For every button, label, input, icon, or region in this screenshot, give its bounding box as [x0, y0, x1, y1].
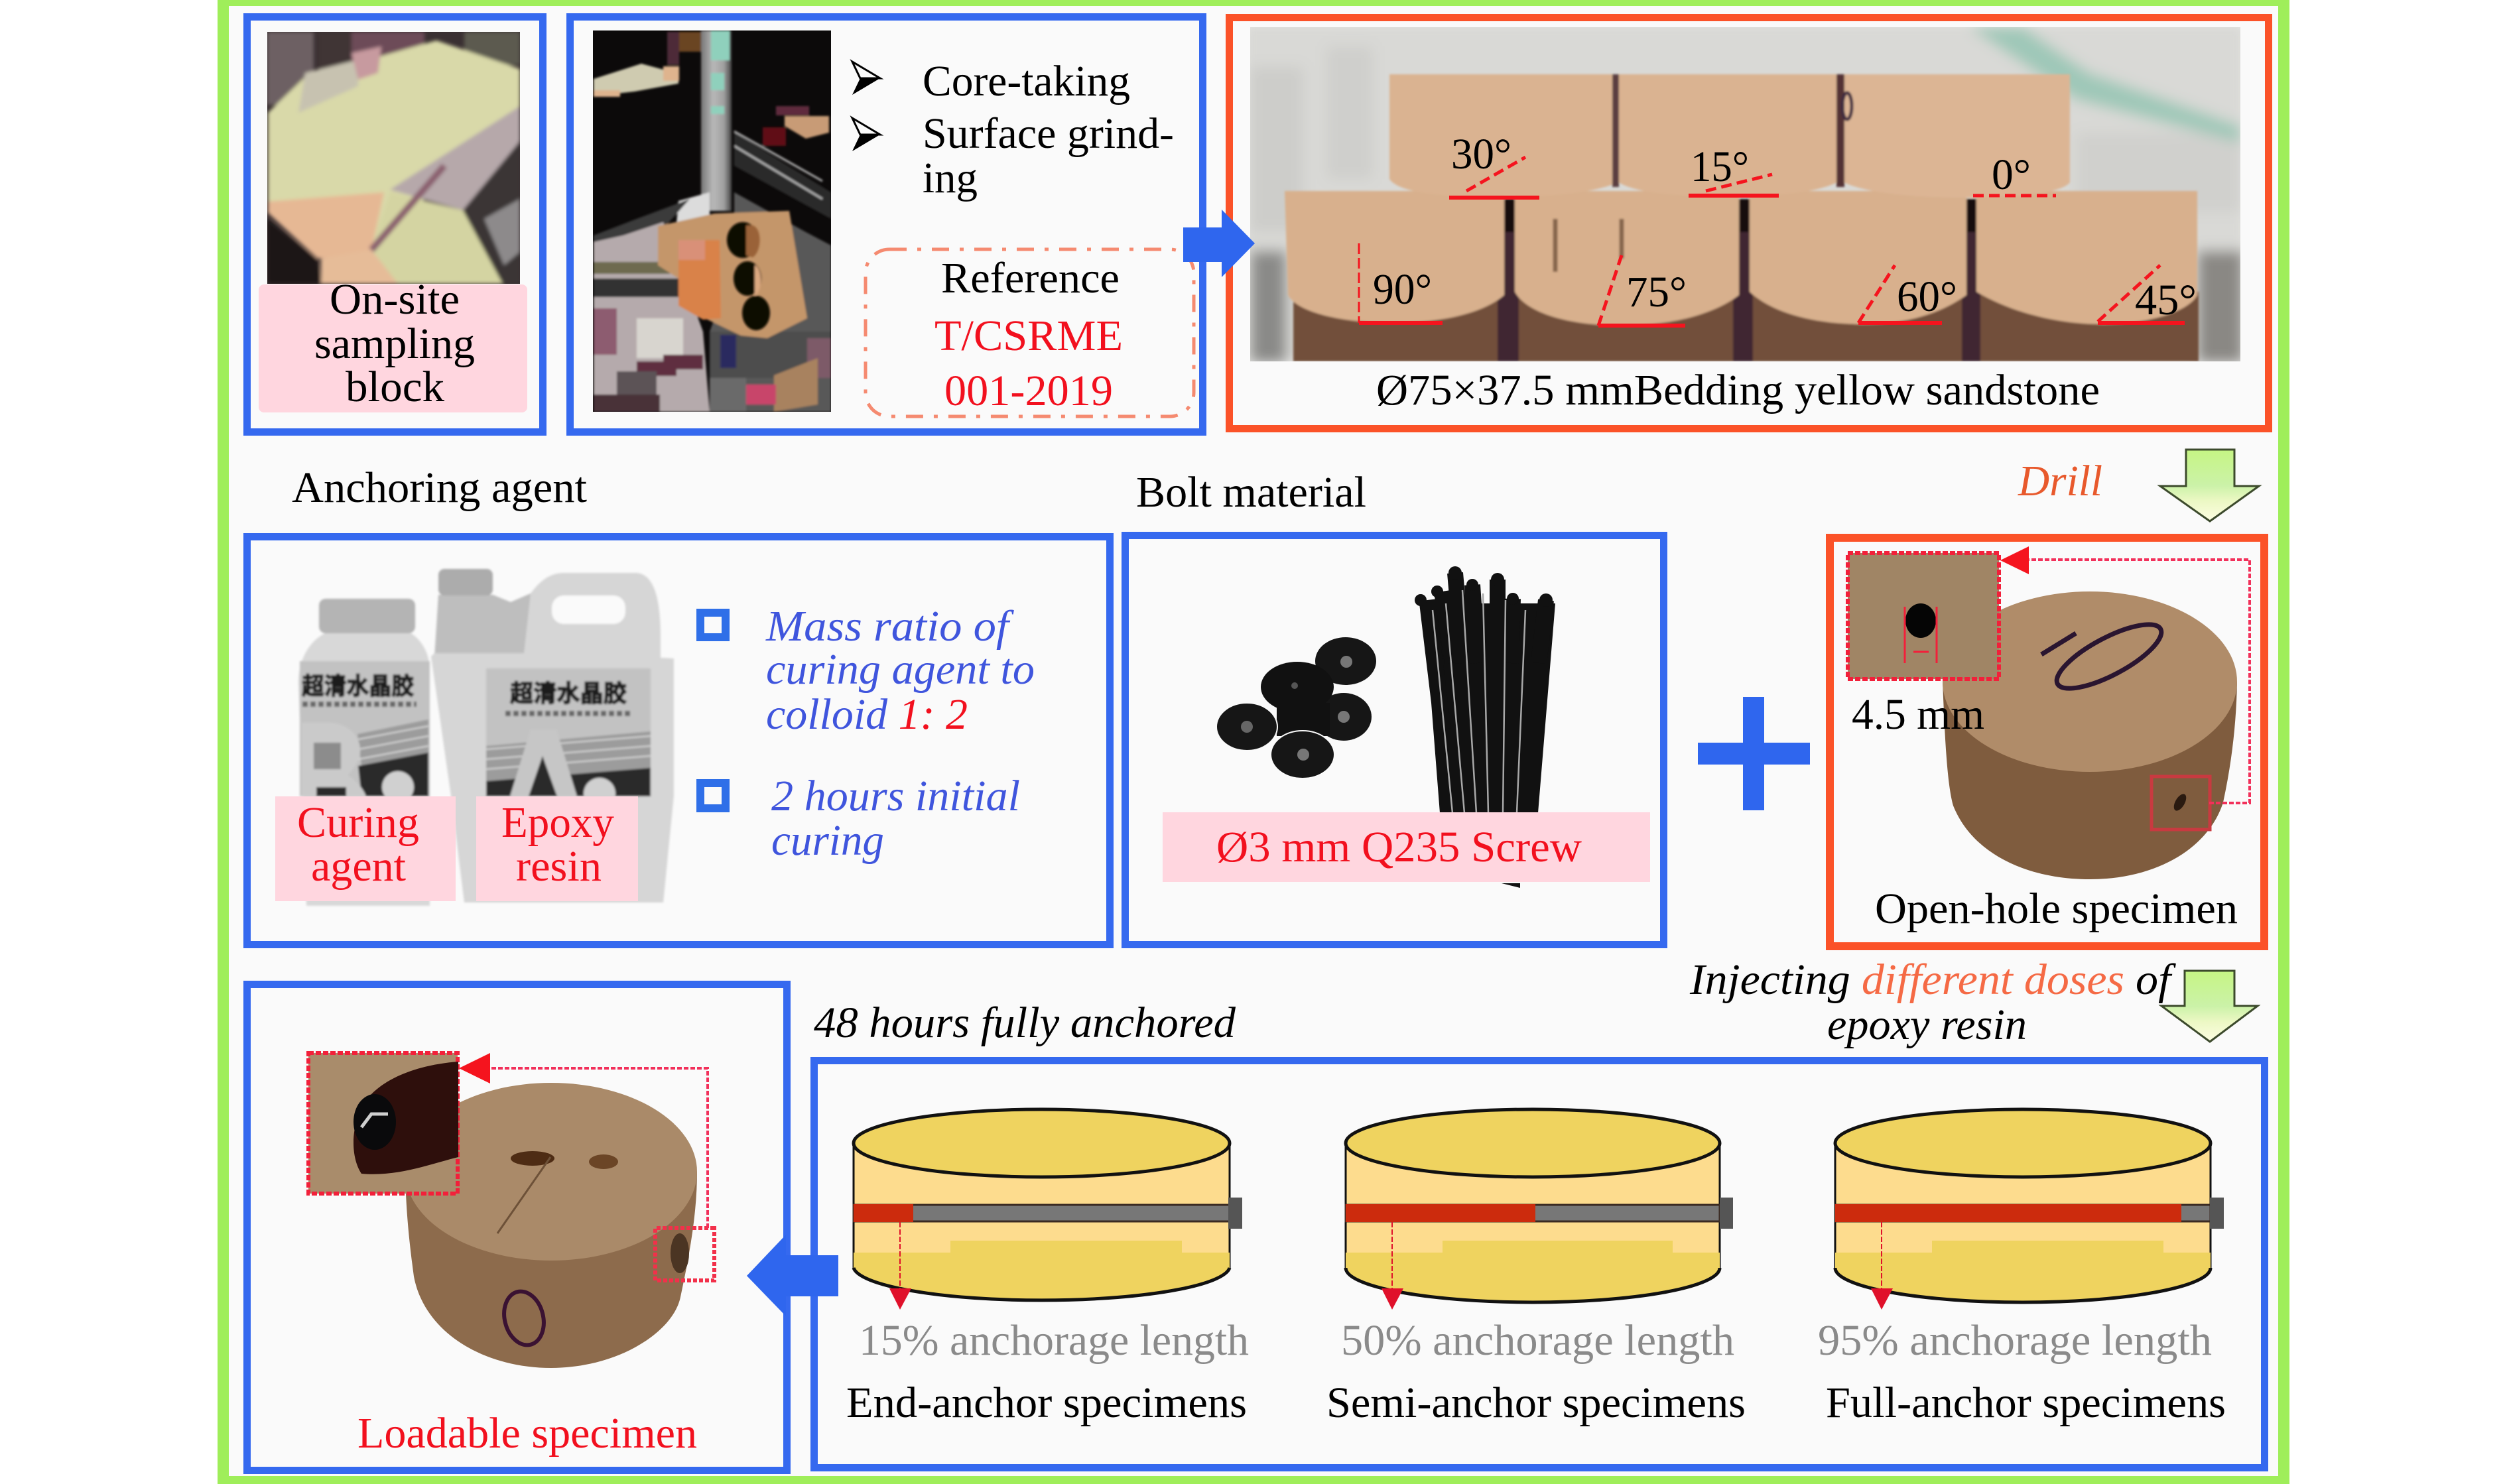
panel: anchoring agent	[247, 537, 1110, 944]
icon: bullet arrow	[852, 62, 880, 95]
labels: anchorage lengths: 50% anchorage length	[1341, 1316, 1734, 1365]
label: epoxy resin	[476, 796, 638, 901]
arrow: zoom to close-up	[459, 1053, 708, 1228]
label: injecting different doses: epoxy resin	[1827, 1001, 2027, 1049]
panel: anchorage length schemes	[814, 1061, 2264, 1468]
callout: reference standard	[866, 249, 1194, 416]
photo: seven bedding angle discs	[1240, 20, 2248, 365]
heading: bolt material: Bolt material	[1136, 468, 1366, 517]
callout: reference standard: 001-2019	[944, 367, 1113, 415]
label: on-site sampling block	[259, 275, 527, 412]
label: epoxy resin: Epoxy	[501, 798, 614, 847]
list: preparation steps: Surface grind-	[923, 109, 1174, 158]
note: initial curing	[700, 772, 1020, 865]
annotation: bedding angle lines	[1359, 157, 2185, 326]
diagram: end-anchor cylinder	[854, 1109, 1242, 1310]
panel: bolt material	[1125, 536, 1663, 944]
photo: washers	[1216, 637, 1376, 778]
label: screw specification: Ø3 mm Q235 Screw	[1216, 823, 1582, 871]
photo: sandstone block	[267, 32, 520, 284]
labels: specimen types: End-anchor specimens	[846, 1379, 1247, 1427]
panel: core-taking and grinding	[570, 17, 1203, 432]
label: curing agent: Curing	[297, 798, 419, 847]
labels: anchorage lengths: 15% anchorage length	[859, 1316, 1249, 1365]
note: mass ratio: Mass ratio of	[765, 602, 1014, 650]
label: curing agent: agent	[311, 842, 406, 891]
label: on-site sampling block: block	[346, 363, 444, 411]
label: injecting different doses: Injecting different doses of	[1689, 956, 2176, 1004]
labels: specimen types: Semi-anchor specimens	[1326, 1379, 1746, 1427]
icon: plus	[1698, 697, 1810, 810]
photo: epoxy bottles	[298, 569, 674, 906]
labels: bedding angles: 75°	[1626, 268, 1687, 316]
photo: screws	[1415, 566, 1555, 888]
label: Drill: Drill	[2018, 457, 2102, 505]
label: epoxy resin: resin	[516, 842, 602, 891]
labels: bedding angles: 15°	[1691, 143, 1749, 191]
label: hole diameter: 4.5 mm	[1852, 690, 1984, 739]
note: initial curing: curing	[771, 816, 884, 865]
callout: reference standard: T/CSRME	[934, 312, 1123, 360]
labels: specimen types	[846, 1379, 2226, 1427]
panel: loadable specimen	[247, 984, 787, 1471]
inset: anchored bolt close-up	[308, 1053, 458, 1194]
callout: reference standard: Reference	[941, 254, 1120, 302]
inset: hole close-up	[1848, 553, 1999, 679]
arrow: drill down	[2160, 450, 2259, 521]
labels: anchorage lengths: 95% anchorage length	[1818, 1316, 2212, 1365]
caption: specimen size and rock: Ø75×37.5 mmBedding yellow sandstone	[1376, 366, 2100, 414]
label: screw specification	[1163, 812, 1650, 882]
heading: anchoring agent: Anchoring agent	[292, 464, 587, 512]
labels: anchorage lengths	[859, 1316, 2212, 1365]
list: preparation steps: Core-taking	[923, 57, 1130, 105]
panel: on-site sampling block	[247, 17, 543, 432]
labels: bedding angles: 60°	[1897, 273, 1957, 321]
labels: bedding angles: 45°	[2135, 276, 2197, 324]
arrow: to loadable specimen	[747, 1235, 838, 1316]
photo: coring machine	[593, 31, 831, 412]
label: curing agent	[275, 796, 456, 901]
labels: bedding angles	[1374, 139, 2195, 314]
label: on-site sampling block: sampling	[314, 320, 475, 368]
arrow: to sandstone specimens	[1183, 210, 1255, 277]
photo: loadable disc	[405, 1083, 714, 1368]
bottle B	[298, 599, 430, 906]
note: mass ratio	[700, 602, 1035, 739]
note: mass ratio: curing agent to	[766, 645, 1035, 694]
label: 48 hours fully anchored: 48 hours fully anchored	[814, 999, 1236, 1047]
label: on-site sampling block: On-site	[330, 275, 460, 324]
bottle B: 超清水晶胶	[302, 672, 414, 700]
list: preparation steps	[852, 57, 1174, 202]
bottle A	[431, 569, 674, 902]
note: initial curing: 2 hours initial	[771, 772, 1020, 820]
photo: drilled disc	[1943, 591, 2237, 879]
diagram: semi-anchor cylinder	[1346, 1109, 1733, 1310]
arrow: zoom to close-up	[2000, 546, 2250, 803]
labels: bedding angles: 0°	[1992, 151, 2031, 199]
bottle A: 超清水晶胶	[510, 680, 627, 707]
icon: bullet arrow	[852, 118, 880, 151]
caption: open-hole specimen: Open-hole specimen	[1875, 885, 2238, 933]
labels: bedding angles: 30°	[1451, 130, 1511, 178]
labels: specimen types: Full-anchor specimens	[1826, 1379, 2226, 1427]
list: preparation steps: ing	[923, 154, 978, 202]
arrow: injecting down	[2161, 971, 2258, 1042]
caption: loadable specimen: Loadable specimen	[357, 1409, 697, 1457]
panel: bedding yellow sandstone specimens	[1230, 17, 2268, 428]
diagram: full-anchor cylinder	[1835, 1109, 2224, 1310]
note: mass ratio: colloid 1: 2	[766, 690, 968, 739]
labels: bedding angles: 90°	[1373, 265, 1432, 314]
label: injecting different doses	[1689, 956, 2176, 1049]
panel: open-hole specimen	[1830, 538, 2264, 946]
